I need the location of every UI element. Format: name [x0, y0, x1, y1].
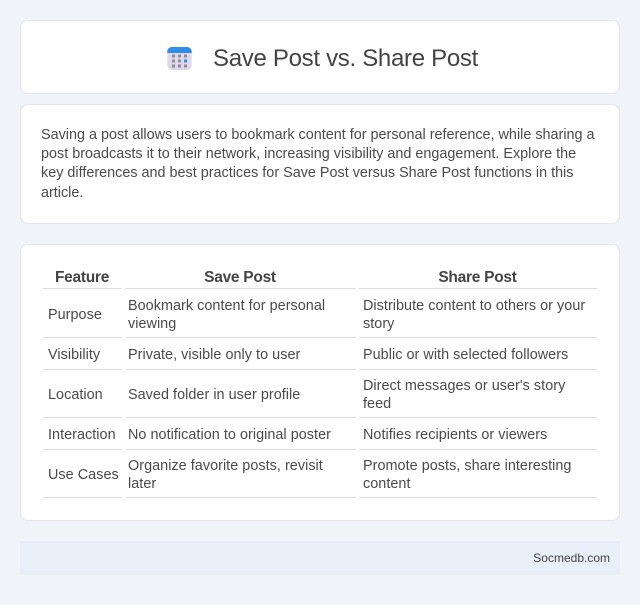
footer bar: [20, 541, 620, 575]
table header: [43, 269, 597, 289]
footer credit: Socmedb.com: [533, 551, 610, 565]
row: Visibility: Public or with selected followers: [363, 347, 568, 363]
row: Visibility: [43, 347, 597, 370]
panel: comparison table: [20, 244, 620, 521]
row: Use Cases: Organize favorite posts, revisit: [128, 458, 323, 474]
table header: Share Post: [438, 269, 517, 286]
panel: title card: [20, 20, 620, 94]
table header: Feature: [55, 269, 109, 286]
row: Interaction: Notifies recipients or viewers: [363, 427, 547, 443]
intro paragraph: [41, 127, 595, 201]
row: Use Cases: Use Cases: [48, 467, 119, 483]
icon: calendar: [167, 47, 192, 70]
row: Interaction: No notification to original poster: [128, 427, 331, 443]
row: Visibility: Private, visible only to user: [128, 347, 300, 363]
row: Purpose: Purpose: [48, 307, 102, 323]
row: Visibility: Visibility: [48, 347, 100, 363]
panel: intro text: [20, 104, 620, 224]
row: Use Cases: [43, 458, 597, 498]
row: Purpose: Bookmark content for personal: [128, 298, 325, 314]
row: Purpose: [43, 298, 597, 338]
row: Location: Direct messages or user's story: [363, 378, 565, 394]
intro paragraph: Saving a post allows users to bookmark content for personal reference, while sharing a: [41, 127, 595, 143]
row: Location: [43, 378, 597, 418]
intro paragraph: key differences and best practices for Save Post versus Share Post functions in this: [41, 165, 573, 181]
row: Purpose: story: [363, 316, 394, 332]
row: Use Cases: Promote posts, share interesting: [363, 458, 571, 474]
row: Interaction: Interaction: [48, 427, 116, 443]
title: Save Post vs. Share Post: [213, 45, 478, 72]
row: Use Cases: content: [363, 476, 410, 492]
row: Location: Location: [48, 387, 103, 403]
row: Purpose: Distribute content to others or your: [363, 298, 585, 314]
row: Use Cases: later: [128, 476, 156, 492]
row: Location: Saved folder in user profile: [128, 387, 300, 403]
table header: Save Post: [204, 269, 276, 286]
row: Location: feed: [363, 396, 391, 412]
intro paragraph: article.: [41, 185, 83, 201]
intro paragraph: post broadcasts it to their network, increasing visibility and engagement. Explore the: [41, 146, 576, 162]
row: Purpose: viewing: [128, 316, 176, 332]
row: Interaction: [43, 427, 597, 450]
